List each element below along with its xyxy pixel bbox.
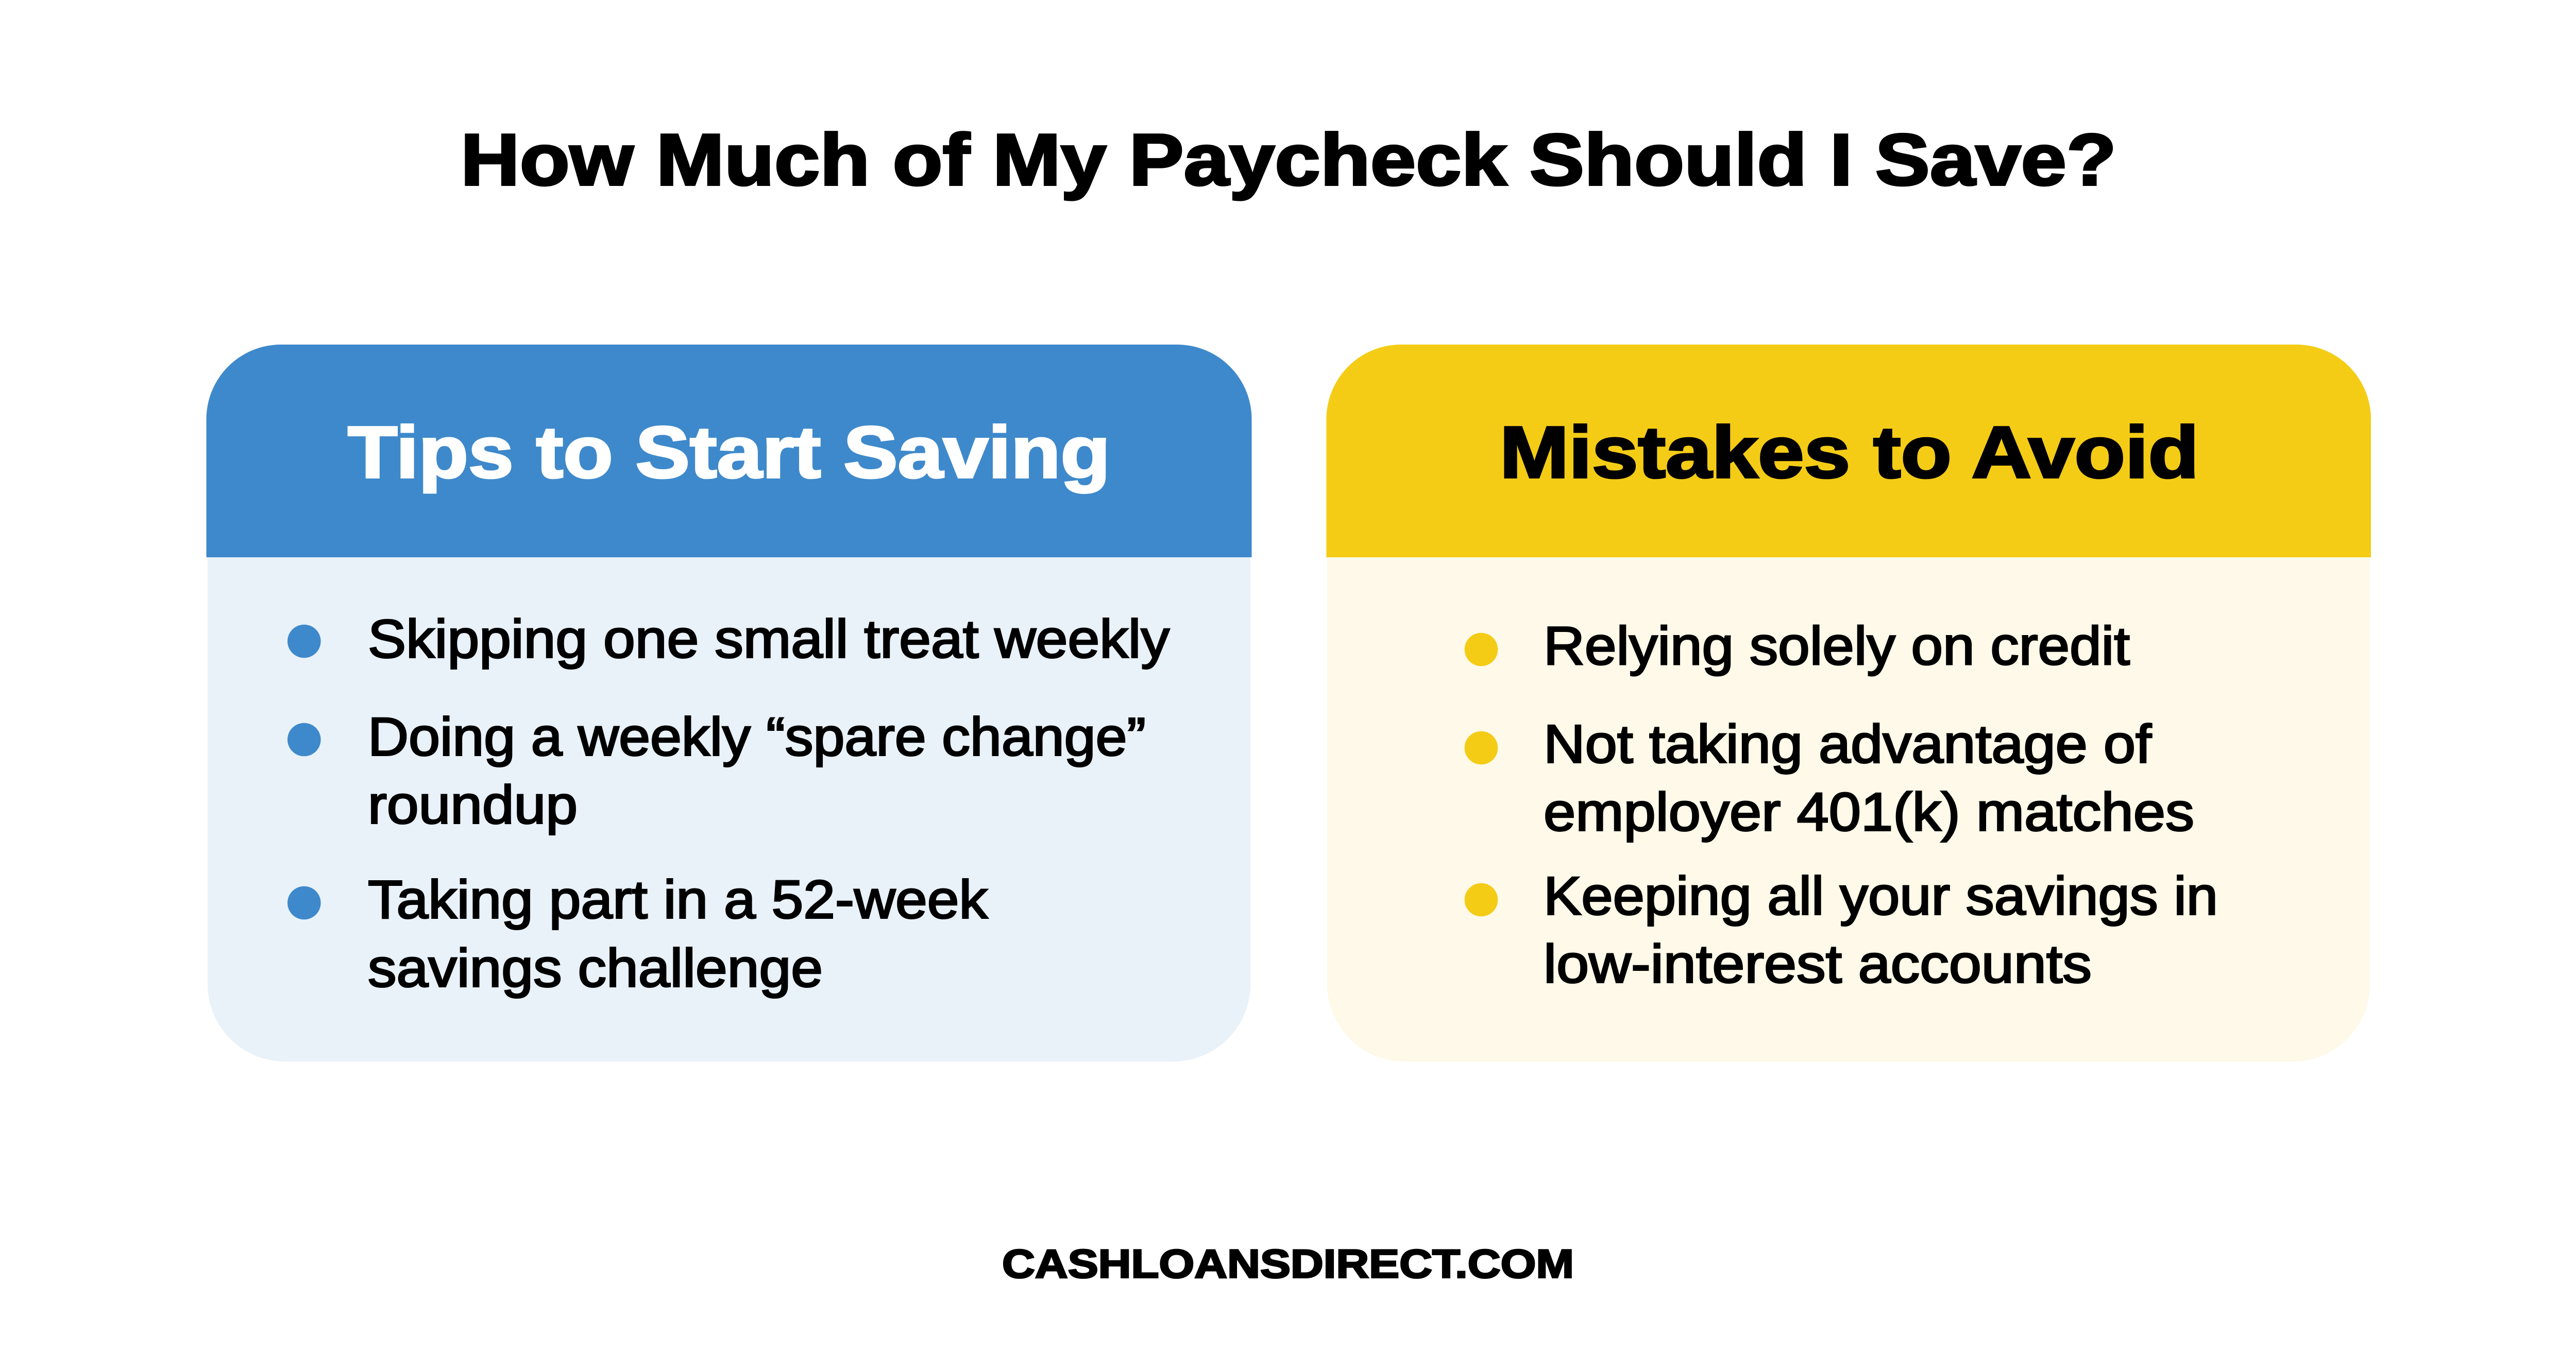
mistake 3 text: low-interest accounts — [1544, 934, 2092, 994]
panel body: tips — [208, 556, 1250, 1062]
mistake 3 text — [1544, 866, 2218, 994]
tip 2 text — [368, 707, 1146, 835]
bullet icon 2 — [1465, 731, 1498, 764]
tip 2 text: roundup — [368, 775, 578, 835]
heading: tips to start saving: Tips to Start Saving — [348, 412, 1110, 493]
mistake 1 text: Relying solely on credit — [1544, 616, 2130, 676]
mistake 3 text: Keeping all your savings in — [1544, 866, 2218, 926]
bullet icon 2 — [287, 723, 321, 756]
panel body: mistakes — [1327, 556, 2370, 1062]
mistake 2 text: employer 401(k) matches — [1544, 782, 2194, 843]
bullet icon 1 — [287, 625, 321, 658]
panel header: mistakes — [1326, 345, 2371, 557]
panel header: tips — [206, 345, 1252, 557]
bullet icon 3 — [1465, 883, 1498, 916]
tip 2 text: Doing a weekly “spare change” — [368, 707, 1146, 767]
tip 3 text: savings challenge — [368, 938, 823, 998]
bullet icon 1 — [1465, 633, 1498, 666]
heading: mistakes to avoid: Mistakes to Avoid — [1500, 412, 2199, 493]
panel: tips to start saving — [206, 345, 1252, 1062]
tip 1 text: Skipping one small treat weekly — [368, 609, 1170, 670]
bullet icon 3 — [287, 886, 321, 919]
mistake 2 text — [1544, 714, 2194, 843]
footer website: CASHLOANSDIRECT.COM — [1002, 1241, 1574, 1287]
mistake 2 text: Not taking advantage of — [1544, 714, 2152, 775]
tip 3 text — [368, 869, 988, 998]
panel: mistakes to avoid — [1326, 345, 2371, 1062]
tip 3 text: Taking part in a 52-week — [368, 869, 988, 930]
title: How Much of My Paycheck Should I Save? — [461, 119, 2116, 201]
